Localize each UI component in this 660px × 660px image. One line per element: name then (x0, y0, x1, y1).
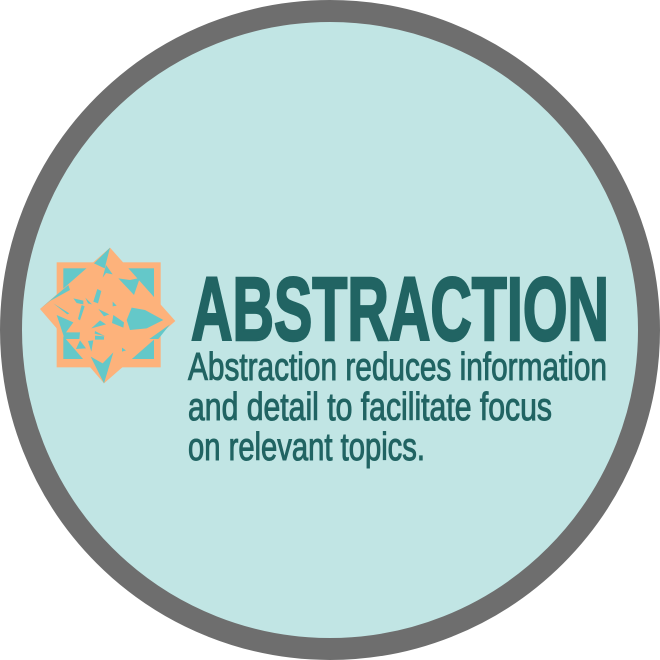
description text: and detail to facilitate focus (188, 386, 552, 429)
description text (188, 346, 607, 469)
icon: abstract star (40, 248, 175, 383)
description text: on relevant topics. (188, 426, 425, 469)
